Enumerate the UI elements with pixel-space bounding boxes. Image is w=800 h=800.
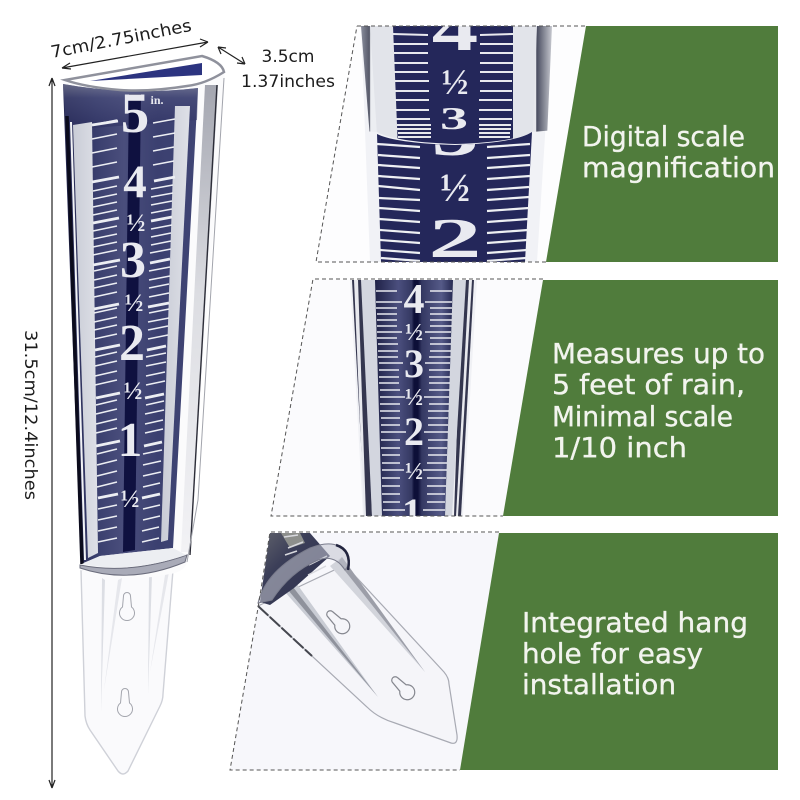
- keyhole lower: [391, 676, 416, 700]
- keyhole lower: [118, 688, 132, 716]
- panel 3 inset background: [230, 533, 499, 770]
- navy scale body: [260, 533, 330, 605]
- spike ribs: [285, 584, 378, 697]
- upper numeral 3: 3: [440, 100, 468, 136]
- numeral 5: 5: [121, 82, 149, 145]
- height arrow: [49, 78, 55, 788]
- panel 3 green block: [460, 533, 778, 770]
- panel 2 dashed frame: [271, 279, 543, 516]
- gauge floor: [82, 548, 186, 567]
- numeral 4: 4: [123, 156, 147, 208]
- lower numeral 3 (cut): 3: [432, 101, 478, 169]
- center dark column: [123, 94, 141, 552]
- dimension: depth: [218, 47, 335, 92]
- panel: measures up to 5 feet: [271, 277, 778, 535]
- scale ticks: [92, 119, 175, 542]
- panel 2 text: Measures up to: [552, 337, 765, 370]
- depth label: 1.37inches: [241, 72, 335, 92]
- right glass lines: [190, 85, 217, 555]
- panel 2 text: 1/10 inch: [552, 431, 687, 464]
- panel 1 green block: [546, 26, 778, 262]
- panel 3 text: hole for easy: [522, 637, 703, 670]
- spike: [81, 570, 173, 774]
- depth label: [241, 47, 335, 92]
- left edge: [67, 116, 82, 564]
- height label: 31.5cm/12.4inches: [20, 330, 40, 500]
- panel 1 inset background: [316, 26, 586, 262]
- panel 3 spike close-up: [258, 533, 457, 743]
- keyhole upper: [326, 610, 350, 634]
- panel 3 dashed frame: [230, 532, 499, 770]
- keyhole upper: [120, 592, 134, 620]
- right glass shading: [181, 85, 218, 552]
- panel 2 numeral 3: 3: [404, 341, 424, 386]
- panel: digital scale magnification: [316, 26, 778, 262]
- panel: integrated hang hole: [230, 532, 778, 770]
- numeral 1: 1: [118, 412, 142, 467]
- depth label: 3.5cm: [262, 47, 314, 67]
- top opening: [65, 56, 224, 90]
- panel 2 numeral 2: 2: [404, 409, 424, 454]
- right light strip: [161, 106, 190, 542]
- numeral one half: ½: [121, 486, 139, 513]
- unit in.: in.: [150, 93, 164, 107]
- numeral one half: ½: [127, 210, 145, 237]
- panel 1 text: Digital scale: [582, 120, 745, 153]
- upper numeral one half: ½: [442, 62, 468, 102]
- width label: 7cm/2.75inches: [49, 16, 193, 63]
- panel 2 numeral 1: 1: [402, 490, 422, 535]
- navy inner back wall: [90, 63, 202, 81]
- navy scale panel: [63, 84, 198, 564]
- panel 2 green block: [503, 280, 778, 516]
- panel 2 text: [552, 337, 765, 464]
- width arrow: [62, 39, 208, 69]
- main rain gauge: [63, 55, 225, 774]
- numeral one half: ½: [125, 290, 143, 317]
- panel 2 text: Minimal scale: [552, 400, 733, 433]
- panel 1 gauge close-up: [361, 26, 552, 262]
- panel 2 numeral one half: ½: [405, 459, 423, 485]
- bottom collar: [80, 555, 187, 575]
- spike blade: [258, 565, 457, 743]
- numeral one half: ½: [124, 378, 142, 405]
- panel 1 dashed frame: [316, 26, 586, 262]
- panel 1 text: magnification: [582, 151, 775, 184]
- numeral 3: 3: [120, 232, 146, 289]
- lower numeral 2: 2: [428, 208, 482, 270]
- dimension: width: [49, 16, 208, 69]
- panel 3 text: installation: [522, 668, 676, 701]
- panel 1 text: [582, 120, 775, 184]
- panel 2 numeral one half: ½: [405, 385, 423, 411]
- panel 3 text: Integrated hang: [522, 606, 748, 639]
- collar rim: [258, 544, 349, 603]
- panel 2 gauge close-up: [350, 277, 477, 535]
- panel 3 text: [522, 606, 748, 701]
- spike ribs: [101, 578, 105, 712]
- numeral 2: 2: [119, 315, 145, 372]
- depth arrow: [218, 47, 245, 64]
- panel 2 text: 5 feet of rain,: [552, 368, 745, 401]
- lower navy scale: [377, 132, 532, 262]
- glass body: [63, 55, 225, 578]
- panel 2 numeral one half: ½: [405, 320, 423, 346]
- dimension: height: [20, 78, 55, 788]
- lower numeral one half: ½: [440, 165, 470, 210]
- panel 2 numeral 4: 4: [404, 277, 424, 323]
- left light strip: [73, 122, 98, 558]
- panel 2 inset background: [271, 280, 543, 516]
